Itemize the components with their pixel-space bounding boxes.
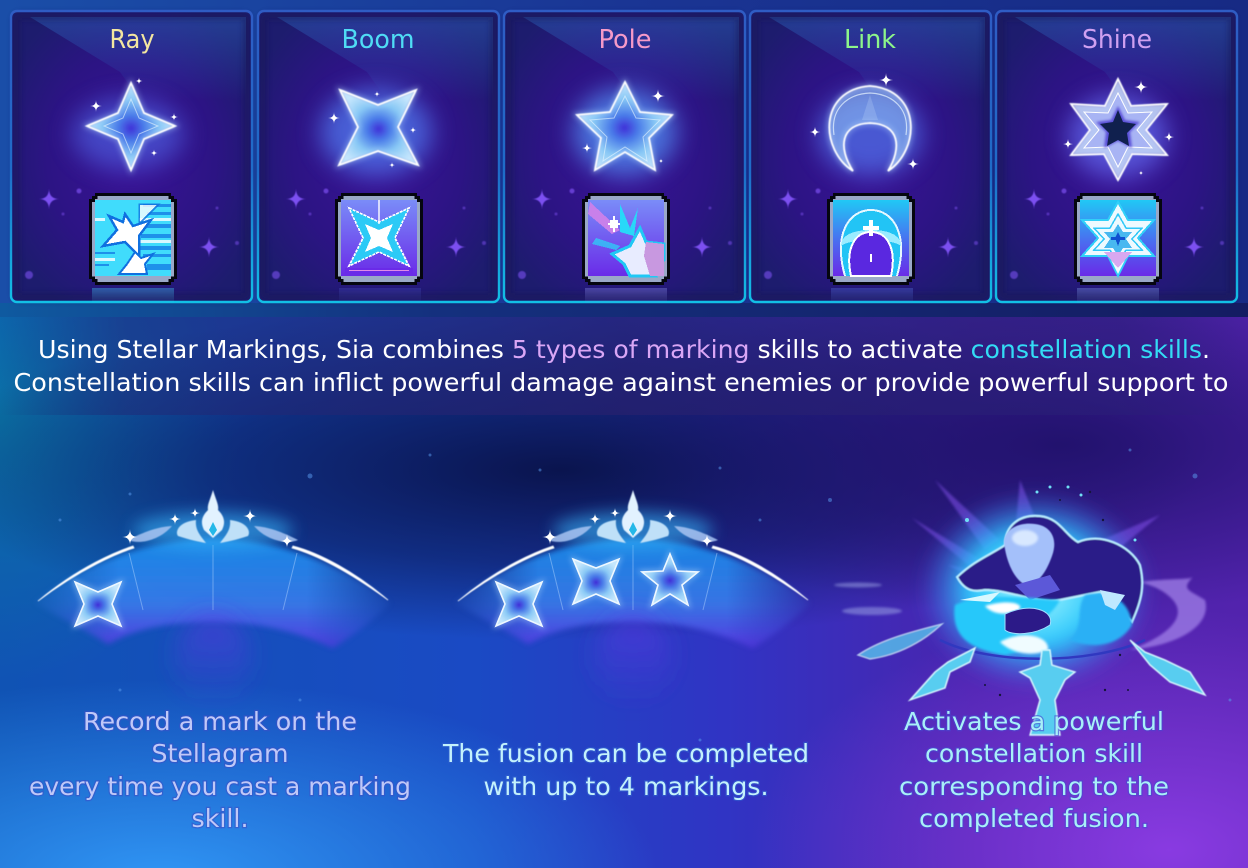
icon: Ray skill (89, 193, 177, 285)
shade under cards (0, 303, 1248, 317)
streaks (834, 582, 902, 615)
caption: record a mark: every time you cast a marking (29, 772, 411, 801)
icon: marking in slot 2 (573, 559, 619, 604)
panel: Shine marking card (996, 11, 1237, 302)
icon: Shine six-point star (1063, 79, 1174, 180)
panel: Pole marking card (504, 11, 745, 302)
text block: description line 2: Constellation skills can inflict powerful damage against enemies or provide powerful support to (14, 368, 1228, 397)
illustration: Stellagram with one marking (37, 490, 389, 686)
heading: Pole: Pole (598, 25, 652, 55)
background dust stars (58, 448, 1232, 742)
cape (957, 516, 1142, 622)
icon: Boom star (320, 88, 432, 176)
caption: record a mark (29, 707, 411, 833)
heading: Ray: Ray (110, 25, 154, 55)
top frame behind cards (0, 0, 1248, 304)
icon: crown (122, 490, 298, 548)
icon: Pole skill (582, 193, 670, 285)
panel: Link marking card (750, 11, 991, 302)
icon: crown (542, 490, 718, 548)
caption: activates: Activates a powerful (904, 707, 1164, 736)
icon: Shine skill (1074, 193, 1162, 285)
illustration: Stellagram with three markings (457, 490, 809, 679)
icon: Link crescent (810, 73, 922, 176)
constellation dots (965, 486, 1136, 542)
icon reflections (92, 288, 1159, 303)
description band (0, 317, 1248, 415)
icon: marking in slot 1 (75, 582, 121, 626)
icon: Ray star (72, 78, 184, 170)
icon: Pole star (573, 82, 677, 176)
ring (940, 640, 1145, 659)
icon: Boom skill (335, 193, 423, 285)
illustration: constellation skill burst (834, 480, 1206, 735)
rays (912, 480, 1160, 590)
heading: Link: Link (844, 25, 896, 55)
panel: Boom marking card (258, 11, 499, 302)
head (1004, 524, 1054, 586)
caption: record a mark: skill. (192, 804, 248, 833)
caption: activates: constellation skill (925, 739, 1143, 768)
caption: activates: corresponding to the (899, 772, 1169, 801)
icon: marking in slot 1 (496, 582, 542, 626)
caption: fusion (442, 739, 809, 801)
text block: description line 1: Using Stellar Markings, Sia combines 5 types of marking skills to activate constellation skills . (38, 335, 1210, 364)
orb (954, 597, 1060, 655)
caption: activates (899, 707, 1169, 833)
caption: fusion: with up to 4 markings. (484, 772, 768, 801)
caption: record a mark: Record a mark on the (83, 707, 357, 736)
icon: Link skill (827, 193, 915, 285)
heading: Boom: Boom (342, 25, 414, 55)
icon: marking in slot 3 (642, 554, 698, 605)
panel: Ray marking card (11, 11, 252, 302)
caption: fusion: The fusion can be completed (442, 739, 809, 768)
caption: record a mark: Stellagram (152, 739, 288, 768)
heading: Shine: Shine (1082, 25, 1152, 55)
swoosh (1130, 577, 1206, 650)
swords (858, 624, 1205, 735)
caption: activates: completed fusion. (919, 804, 1149, 833)
